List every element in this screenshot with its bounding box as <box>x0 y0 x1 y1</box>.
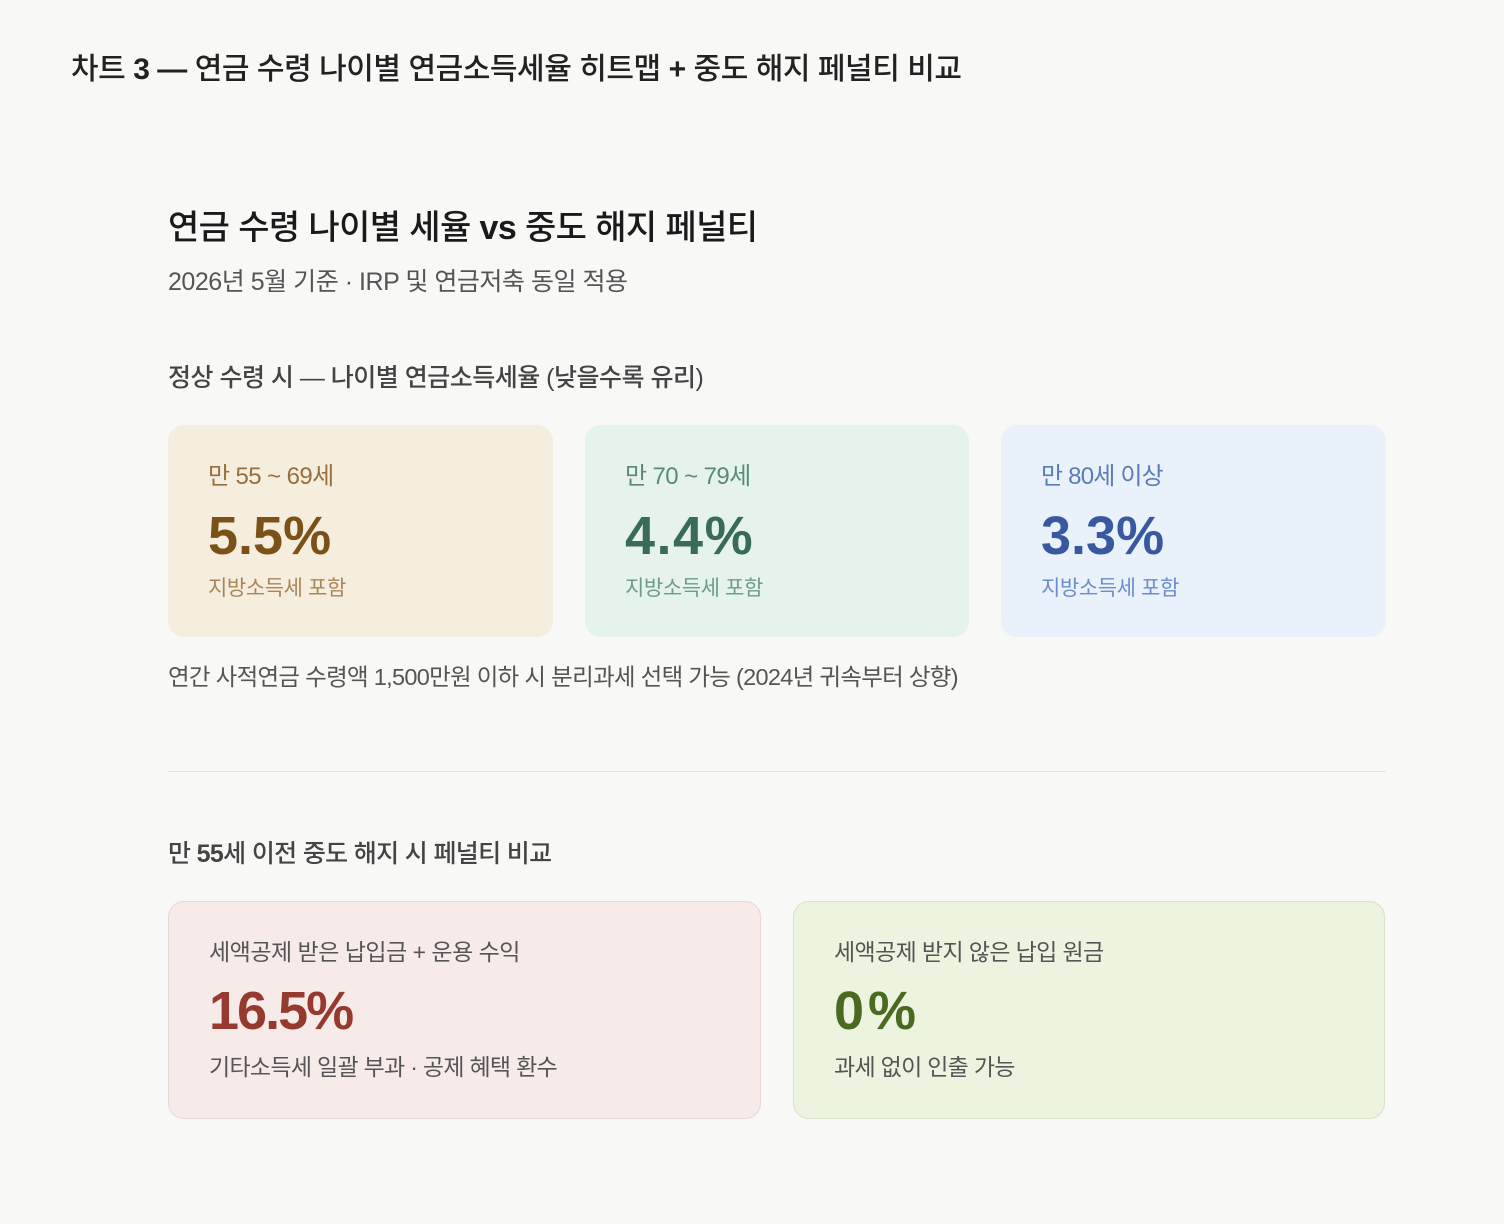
chart heading: 연금 수령 나이별 세율 vs 중도 해지 페널티 <box>168 209 757 247</box>
panel: non-deducted principal <box>793 901 1385 1119</box>
panel label: 세액공제 받은 납입금 + 운용 수익 <box>209 939 520 965</box>
panel: deducted contributions <box>168 901 761 1119</box>
penalty rate: 0% <box>834 981 920 1041</box>
note: 지방소득세 포함 <box>1041 577 1179 600</box>
penalty rate: 16.5% <box>209 981 352 1041</box>
footnote: 연간 사적연금 수령액 1,500만원 이하 시 분리과세 선택 가능 (2024년 귀속부터 상향) <box>168 664 958 690</box>
age label: 만 55 ~ 69세 <box>208 463 334 490</box>
panel: age 80+ <box>1001 425 1386 637</box>
tax rate: 5.5% <box>208 506 331 566</box>
panel: age 70-79 <box>585 425 969 637</box>
panel note: 기타소득세 일괄 부과 · 공제 혜택 환수 <box>209 1054 557 1080</box>
note: 지방소득세 포함 <box>625 577 763 600</box>
page title: 차트 3 — 연금 수령 나이별 연금소득세율 히트맵 + 중도 해지 페널티 비교 <box>71 53 962 86</box>
section heading: early termination: 만 55세 이전 중도 해지 시 페널티 비교 <box>168 840 552 868</box>
note: 지방소득세 포함 <box>208 577 346 600</box>
panel: age 55-69 <box>168 425 553 637</box>
age label: 만 80세 이상 <box>1041 463 1163 490</box>
panel note: 과세 없이 인출 가능 <box>834 1054 1015 1080</box>
panel label: 세액공제 받지 않은 납입 원금 <box>834 939 1104 965</box>
age label: 만 70 ~ 79세 <box>625 463 751 490</box>
section heading: normal receipt: 정상 수령 시 — 나이별 연금소득세율 (낮을수록 유리) <box>168 364 703 392</box>
tax rate: 3.3% <box>1041 506 1164 566</box>
chart subtitle: 2026년 5월 기준 · IRP 및 연금저축 동일 적용 <box>168 268 628 296</box>
tax rate: 4.4% <box>625 506 754 566</box>
